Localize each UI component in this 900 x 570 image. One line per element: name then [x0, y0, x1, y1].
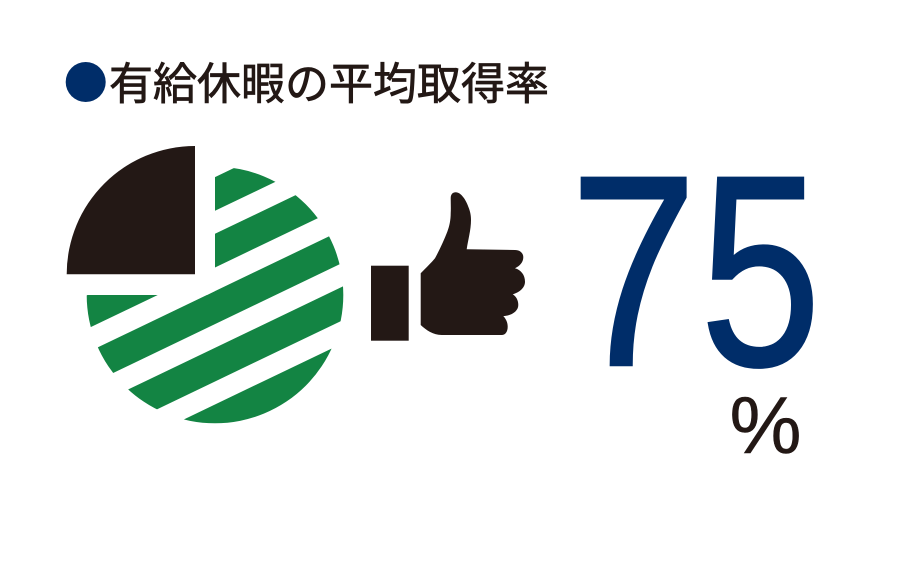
big number: 75 [570, 120, 821, 424]
pie slice: not taken, dark quarter [67, 146, 195, 274]
pie chart [66, 146, 344, 424]
unit: percent: % [730, 381, 802, 471]
icon: heading bullet [66, 62, 106, 102]
big number: 75: 7 [570, 120, 697, 423]
title: 有給休暇の平均取得率 [109, 60, 549, 109]
infographic: average paid leave utilisation [66, 62, 813, 454]
big number: 75: 5 [700, 120, 821, 424]
pie slice: taken, green striped three quarters [86, 168, 344, 424]
icon: thumbs up [371, 192, 525, 341]
